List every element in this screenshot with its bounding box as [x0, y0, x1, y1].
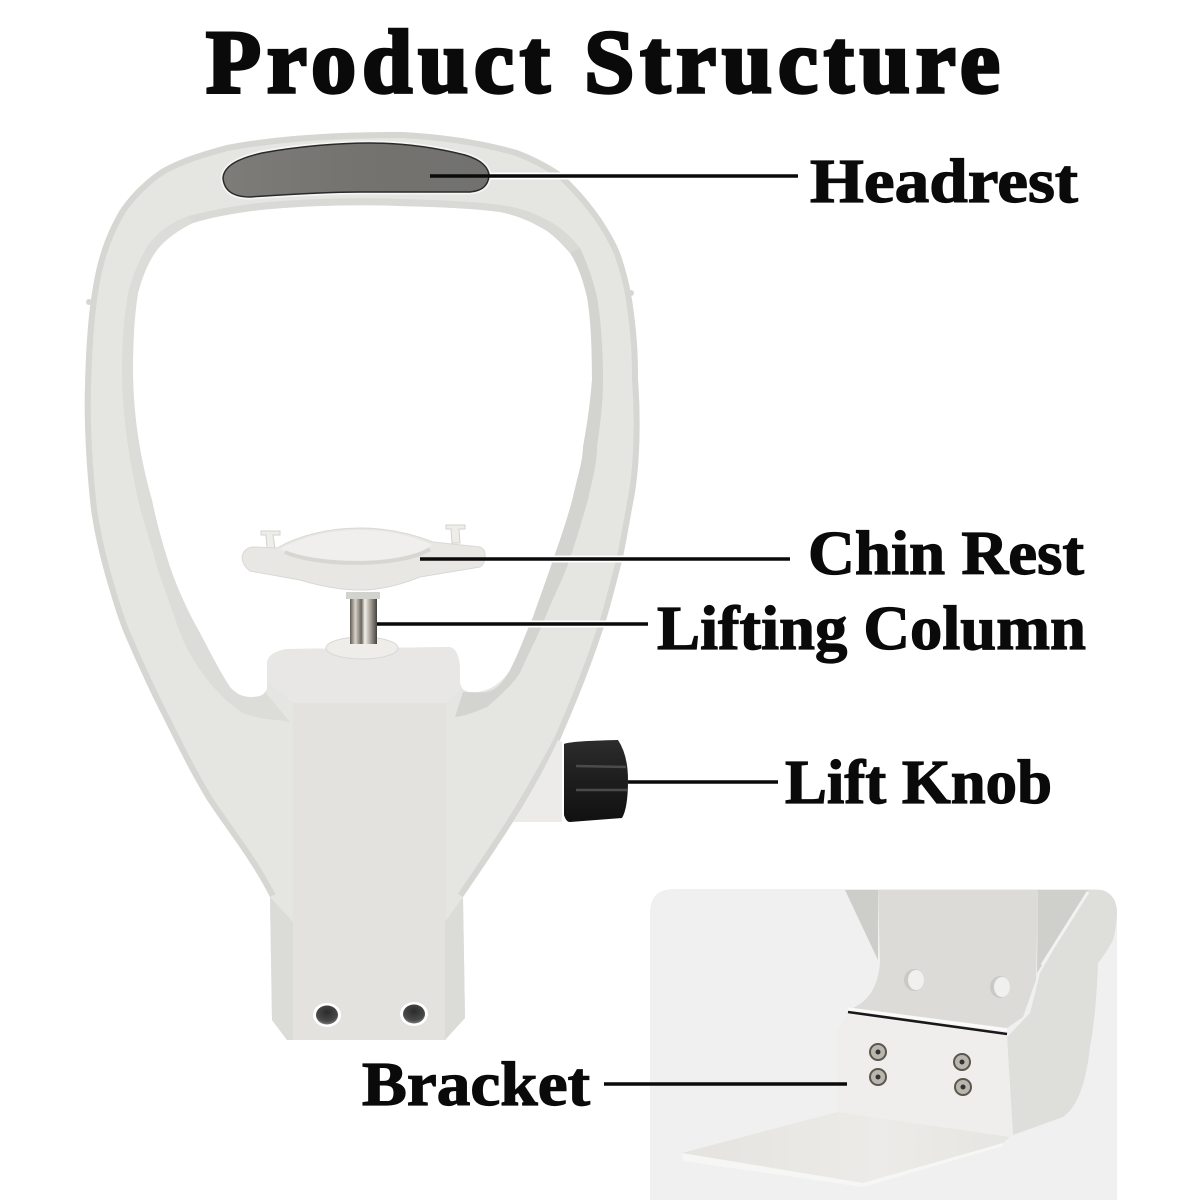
callout: bracket: Bracket [362, 1051, 590, 1119]
chin rest pegs [261, 525, 465, 548]
chin rest cup [280, 530, 432, 562]
knob stem [513, 740, 562, 822]
upper plate with holes [853, 890, 1038, 1028]
inner shading on right arm [455, 248, 603, 717]
callout: lift knob: Lift Knob [785, 749, 1052, 817]
lifting knob [513, 740, 628, 822]
mounting holes [313, 1002, 428, 1027]
foot plate [682, 1112, 1010, 1185]
frame bumps [86, 299, 92, 305]
base lower side shading [270, 897, 293, 1040]
inner shading on top bar [188, 198, 580, 253]
panel: bracket inset [650, 889, 1117, 1200]
callout: lifting column: Lifting Column [657, 595, 1086, 663]
right rib [1037, 890, 1088, 973]
callout: headrest: Headrest [810, 148, 1078, 216]
column shaft [350, 598, 377, 644]
base block top [267, 647, 460, 703]
outer housing [1007, 890, 1117, 1135]
lifting column [326, 592, 398, 659]
left rib [845, 890, 878, 960]
panel: main product, headrest frame and base [85, 132, 640, 1040]
screws [870, 1044, 971, 1095]
column base collar [326, 637, 398, 659]
title: Product Structure [206, 13, 1000, 112]
inner shading on left arm [122, 216, 290, 722]
knob grip [564, 740, 628, 822]
front plate [837, 1015, 1012, 1137]
callout: chin rest: Chin Rest [808, 520, 1084, 588]
frame and base body [85, 132, 640, 1040]
icon: headrest pad [223, 143, 489, 197]
plate edge [848, 1012, 1007, 1034]
base centre panel [293, 668, 446, 1040]
chin rest plate [242, 528, 485, 590]
outer edge shading [85, 132, 640, 897]
inset background [650, 889, 1117, 1200]
chin rest [242, 525, 485, 590]
